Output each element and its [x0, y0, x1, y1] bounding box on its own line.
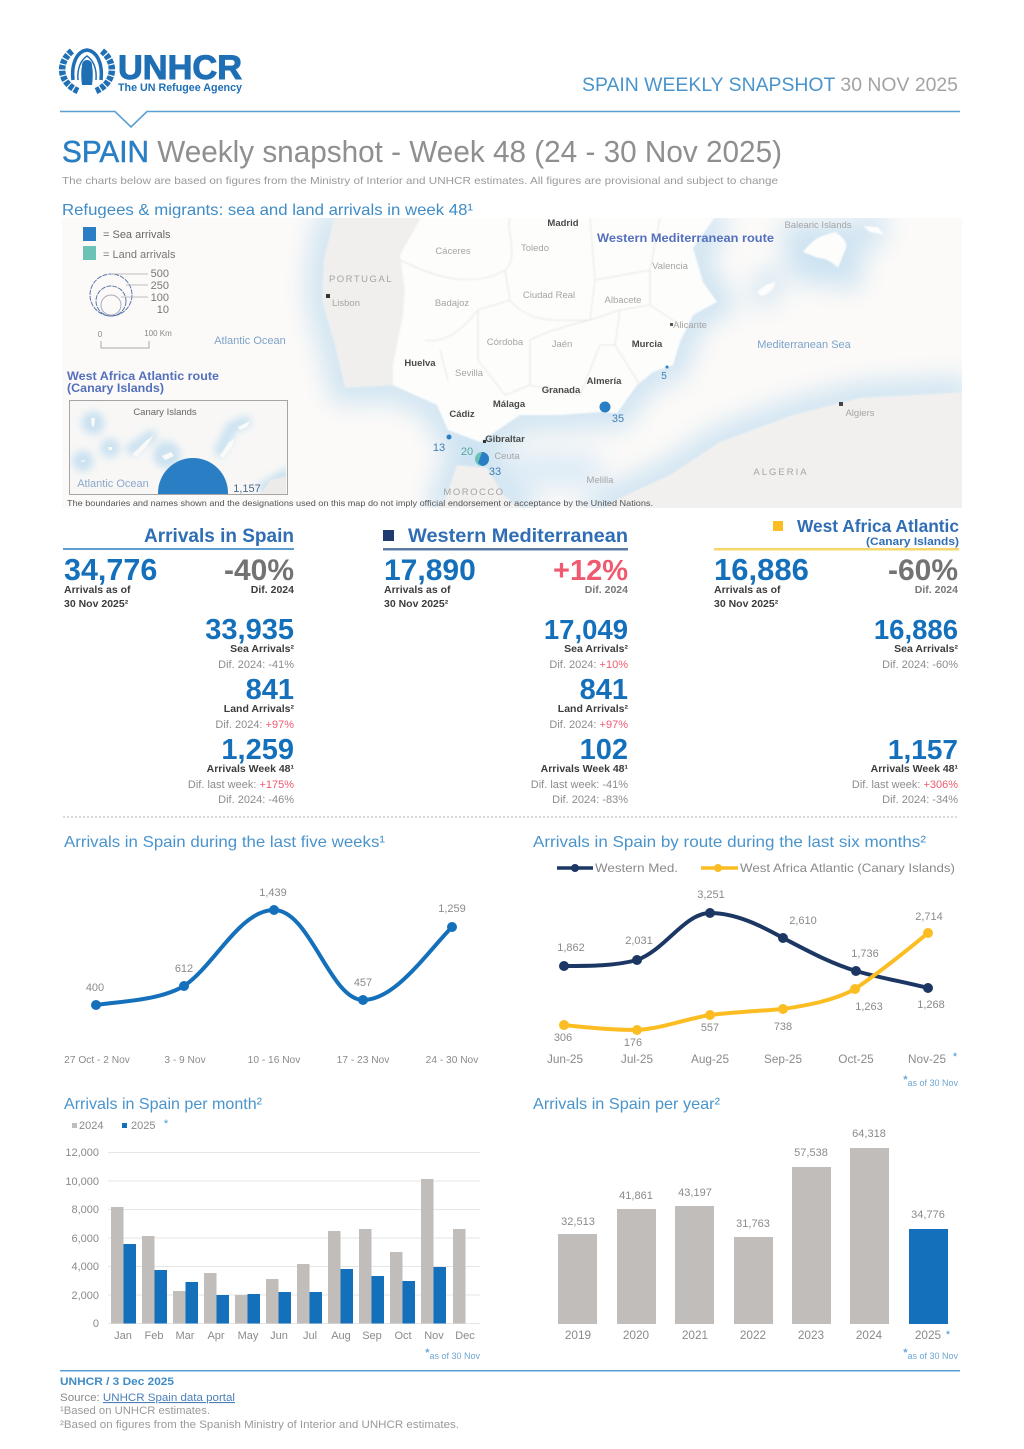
- Iberian land Portugal: [322, 210, 425, 388]
- x axis labels: *: [953, 1051, 958, 1063]
- data labels: [554, 889, 945, 1049]
- panel: arrivals map: [67, 218, 962, 508]
- data labels: 306: [554, 1032, 572, 1044]
- x axis labels: Dec: [455, 1330, 475, 1342]
- chart legend: *: [164, 1118, 169, 1130]
- panel: West Africa Atlantic: Sea Arrivals²: [894, 643, 958, 655]
- map legend: 0: [98, 330, 103, 339]
- x axis labels: May: [238, 1330, 259, 1342]
- chart legend: 2025: [131, 1120, 155, 1132]
- panel: Arrivals in Spain: Dif. 2024: +97%: [215, 719, 294, 731]
- Balearic islands: [757, 226, 884, 296]
- panel: Western Mediterranean: 30 Nov 2025²: [384, 598, 449, 610]
- map background: [62, 218, 962, 508]
- chart title: Arrivals in Spain per month²: [64, 1096, 263, 1113]
- total arrivals: 16,886: [714, 552, 809, 587]
- footnote: as of 30 Nov: *: [903, 1347, 908, 1359]
- chart title: Arrivals in Spain per year²: [533, 1096, 721, 1113]
- footnote: as of 30 Nov: as of 30 Nov: [907, 1351, 958, 1361]
- bars 2025: [124, 1244, 446, 1324]
- x axis labels: [547, 1051, 958, 1066]
- data labels: 2,610: [789, 915, 817, 927]
- total difference: +12%: [553, 555, 628, 587]
- footnote: as of 30 Nov: *: [903, 1074, 908, 1086]
- data labels: [561, 1128, 945, 1230]
- map place labels: Córdoba: [487, 337, 524, 348]
- x axis labels: 2024: [856, 1328, 883, 1342]
- heading: West Africa Atlantic: [797, 516, 959, 536]
- x axis labels: [114, 1330, 475, 1342]
- y axis labels: 4,000: [71, 1261, 99, 1273]
- x axis labels: 24 - 30 Nov: [426, 1055, 479, 1066]
- heading subtitle: (Canary Islands): [866, 536, 959, 548]
- chart legend: Western Med.: [595, 861, 678, 875]
- map legend: 500: [151, 268, 169, 280]
- panel: Western Mediterranean: Dif. 2024: +10%: [549, 659, 628, 671]
- x axis labels: [565, 1328, 951, 1342]
- map place labels: Melilla: [587, 475, 614, 486]
- credit line: UNHCR / 3 Dec 2025: [60, 1376, 174, 1388]
- x axis labels: 27 Oct - 2 Nov: [64, 1055, 131, 1066]
- map place labels: Algiers: [845, 408, 875, 419]
- data labels: 1,862: [557, 942, 585, 954]
- data labels: 32,513: [561, 1216, 595, 1228]
- bars: [558, 1148, 948, 1324]
- data labels: 1,259: [438, 903, 466, 915]
- x axis labels: 2021: [682, 1328, 708, 1342]
- panel: Western Mediterranean: Dif. last week: -41%: [531, 779, 628, 791]
- panel: Western Mediterranean: Arrivals Week 48¹: [541, 763, 629, 775]
- arrival bubbles: [433, 366, 668, 478]
- x axis labels: Mar: [176, 1330, 195, 1342]
- data labels: 31,763: [736, 1218, 770, 1230]
- title: SPAIN Weekly snapshot - Week 48 (24 - 30 Nov 2025): [62, 134, 782, 169]
- panel: Western Mediterranean: Arrivals as of: [384, 584, 451, 596]
- data labels: 557: [701, 1022, 719, 1034]
- x axis labels: Jun-25: [547, 1052, 583, 1066]
- map place labels: Albacete: [605, 295, 641, 306]
- panel: Arrivals in Spain: Dif. 2024: -46%: [218, 794, 294, 806]
- x axis labels: 2019: [565, 1328, 591, 1342]
- map place labels: Cáceres: [435, 246, 471, 257]
- map place labels: MOROCCO: [443, 487, 505, 498]
- land arrivals: 841: [580, 674, 628, 706]
- header rule with chevron: [60, 112, 960, 127]
- map place labels: Cádiz: [449, 409, 475, 420]
- panel: West Africa Atlantic: Dif. 2024: -34%: [882, 794, 958, 806]
- data labels: 612: [175, 963, 193, 975]
- data labels: 176: [624, 1037, 642, 1049]
- data labels: 400: [86, 982, 104, 994]
- map place labels: Murcia: [632, 339, 663, 350]
- y axis labels: 0: [93, 1318, 99, 1330]
- chart legend: [72, 1118, 169, 1132]
- route label: West Africa Atlantic: West Africa Atlantic route: [67, 369, 219, 383]
- map place labels: Balearic Islands: [784, 220, 852, 231]
- map legend: = Land arrivals: [103, 249, 176, 261]
- panel: West Africa Atlantic: Arrivals Week 48¹: [871, 763, 959, 775]
- sea arrivals: 33,935: [205, 614, 294, 646]
- map legend: 10: [157, 304, 169, 316]
- x axis labels: Aug-25: [691, 1052, 729, 1066]
- data labels: 2,031: [625, 935, 653, 947]
- x axis labels: Nov: [424, 1330, 444, 1342]
- data labels: 34,776: [911, 1209, 945, 1221]
- panel: Arrivals in Spain: Sea Arrivals²: [230, 643, 294, 655]
- header snapshot label: SPAIN WEEKLY SNAPSHOT 30 NOV 2025: [582, 75, 958, 96]
- sea labels: Mediterranean Sea: [757, 339, 852, 351]
- map place labels: Valencia: [652, 261, 689, 272]
- map place labels: Ceuta: [494, 451, 520, 462]
- x axis labels: 10 - 16 Nov: [248, 1055, 301, 1066]
- chart title: Arrivals in Spain during the last five weeks¹: [64, 834, 385, 851]
- panel: Arrivals in Spain: Arrivals as of: [64, 584, 131, 596]
- y axis labels: [65, 1147, 99, 1330]
- panel: West Africa Atlantic: 30 Nov 2025²: [714, 598, 779, 610]
- x axis labels: [64, 1055, 479, 1066]
- map legend: [83, 227, 176, 348]
- line: Western Med: [559, 908, 933, 993]
- panel: Western Mediterranean: [383, 525, 629, 806]
- data labels: 1,263: [855, 1001, 883, 1013]
- panel: Western Mediterranean: Dif. 2024: +97%: [549, 719, 628, 731]
- icon: route colour square: [773, 521, 783, 531]
- week arrivals: 1,259: [221, 734, 294, 766]
- map place labels: Alicante: [673, 320, 707, 331]
- sea labels: Atlantic Ocean: [214, 335, 286, 347]
- y axis labels: 6,000: [71, 1233, 99, 1245]
- panel: Arrivals in Spain: Dif. last week: +175%: [188, 779, 294, 791]
- total arrivals: 17,890: [384, 554, 476, 587]
- chart title: Arrivals in Spain by route during the last six months²: [533, 834, 927, 851]
- sea arrivals: 17,049: [544, 614, 628, 645]
- footnote: as of 30 Nov: as of 30 Nov: [907, 1078, 958, 1088]
- map heading: Refugees & migrants: sea and land arrivals in week 48¹: [62, 202, 473, 219]
- footnote: as of 30 Nov: as of 30 Nov: [429, 1351, 480, 1361]
- x axis labels: 2020: [623, 1328, 650, 1342]
- data labels: 1,268: [917, 999, 945, 1011]
- panel: Western Mediterranean: Land Arrivals²: [558, 703, 628, 715]
- inset: Canary Islands: [69, 400, 288, 495]
- panel: Arrivals in Spain: Dif. 2024: -41%: [218, 659, 294, 671]
- y axis labels: 2,000: [71, 1290, 99, 1302]
- y axis labels: 10,000: [65, 1176, 99, 1188]
- chart: arrivals by route: [533, 834, 958, 1088]
- x axis labels: Oct-25: [838, 1052, 874, 1066]
- arrival bubbles: 5: [661, 371, 667, 382]
- map place labels: ALGERIA: [753, 467, 809, 478]
- map place labels: [326, 218, 875, 498]
- sea arrivals: 16,886: [874, 614, 958, 645]
- x axis labels: Sep: [362, 1330, 382, 1342]
- icon: route colour square: [383, 530, 394, 541]
- panel: West Africa Atlantic: Dif. 2024: [915, 584, 958, 596]
- chart legend: West Africa Atlantic (Canary Islands): [740, 861, 955, 875]
- map legend: = Sea arrivals: [103, 229, 171, 241]
- data labels: [86, 887, 466, 994]
- map place labels: Toledo: [521, 243, 549, 254]
- data labels: 2,714: [915, 911, 943, 923]
- data labels: 1,439: [259, 887, 287, 899]
- panel: West Africa Atlantic: Dif. last week: +306%: [852, 779, 958, 791]
- map place labels: PORTUGAL: [329, 274, 393, 285]
- panel: Western Mediterranean: Dif. 2024: [585, 584, 628, 596]
- sea glow: [322, 210, 970, 515]
- icon: UNHCR emblem: [62, 50, 112, 91]
- x axis labels: Jul: [303, 1330, 317, 1342]
- heading: Western Mediterranean: [408, 525, 628, 547]
- chart legend: 2024: [79, 1120, 103, 1132]
- y axis labels: 12,000: [65, 1147, 99, 1159]
- x axis labels: Jul-25: [621, 1052, 653, 1066]
- map place labels: Gibraltar: [485, 434, 525, 445]
- arrival bubbles: 33: [489, 466, 501, 478]
- map place labels: Lisbon: [332, 298, 360, 309]
- data labels: 1,736: [851, 948, 879, 960]
- panel: Arrivals in Spain: Arrivals Week 48¹: [207, 763, 295, 775]
- chart legend: [557, 861, 955, 875]
- map place labels: Málaga: [493, 399, 526, 410]
- x axis labels: 17 - 23 Nov: [337, 1055, 390, 1066]
- x axis labels: Nov-25: [908, 1052, 946, 1066]
- bars 2024: [111, 1179, 466, 1324]
- arrival bubbles: 20: [461, 446, 473, 458]
- x axis labels: Feb: [145, 1330, 163, 1342]
- panel: West Africa Atlantic: [714, 516, 959, 806]
- logo tagline: The UN Refugee Agency: [118, 82, 243, 94]
- sea labels: [214, 335, 852, 351]
- inset: Canary Islands: Atlantic Ocean: [77, 478, 149, 490]
- week arrivals: 1,157: [888, 734, 958, 765]
- line: West Africa Atlantic: [559, 928, 933, 1035]
- data labels: 64,318: [852, 1128, 886, 1140]
- land arrivals: 841: [246, 674, 294, 706]
- arrival bubbles: 35: [612, 413, 624, 425]
- panel: Arrivals in Spain: [63, 526, 295, 806]
- x axis labels: 2023: [798, 1328, 825, 1342]
- map legend: 250: [151, 280, 169, 292]
- inset: Canary Islands: Canary Islands: [133, 407, 197, 418]
- data labels: 41,861: [619, 1190, 653, 1202]
- total difference: -40%: [224, 554, 294, 587]
- map place labels: Badajoz: [435, 298, 469, 309]
- map legend: 100: [151, 292, 169, 304]
- route label: Canary Islands: (Canary Islands): [67, 381, 164, 395]
- data labels: 43,197: [678, 1187, 712, 1199]
- province boundaries: [400, 218, 680, 395]
- footnote: as of 30 Nov: *: [425, 1347, 430, 1359]
- map legend: 100 Km: [144, 329, 172, 338]
- data labels: 738: [774, 1021, 792, 1033]
- x axis labels: *: [946, 1329, 951, 1341]
- logo wordmark: UNHCR: [118, 49, 242, 87]
- inset: Canary Islands: 1,157: [233, 483, 261, 495]
- gridlines: [108, 1152, 480, 1324]
- Morocco and Algeria land: [440, 392, 970, 515]
- footnote 1: ¹Based on UNHCR estimates.: [60, 1405, 210, 1417]
- Spain land: [393, 210, 720, 442]
- arrival bubbles: 13: [433, 442, 445, 454]
- source line: Source: UNHCR Spain data portal: [60, 1392, 235, 1404]
- map place labels: Huelva: [404, 358, 436, 369]
- heading: Arrivals in Spain: [144, 526, 294, 547]
- map disclaimer: The boundaries and names shown and the designations used on this map do not imply official endorsement or acceptance by the United Nations.: [67, 498, 653, 508]
- footnote 2: ²Based on figures from the Spanish Ministry of Interior and UNHCR estimates.: [60, 1419, 459, 1431]
- x axis labels: Aug: [331, 1330, 351, 1342]
- chart: arrivals per year: [533, 1096, 958, 1361]
- total arrivals: 34,776: [64, 553, 157, 587]
- data labels: 457: [354, 977, 372, 989]
- data labels: 3,251: [697, 889, 725, 901]
- total difference: -60%: [888, 554, 958, 587]
- panel: Western Mediterranean: Dif. 2024: -83%: [552, 794, 628, 806]
- x axis labels: Oct: [394, 1330, 412, 1342]
- x axis labels: 2025: [915, 1328, 942, 1342]
- map place labels: Almería: [587, 376, 622, 387]
- y axis labels: 8,000: [71, 1204, 99, 1216]
- panel: West Africa Atlantic: Arrivals as of: [714, 584, 781, 596]
- panel: Western Mediterranean: Sea Arrivals²: [564, 643, 628, 655]
- x axis labels: Jan: [114, 1330, 132, 1342]
- subtitle: The charts below are based on figures from the Ministry of Interior and UNHCR estimates. All figures are provisional and subject to change: [62, 175, 778, 187]
- chart: arrivals per month: [64, 1096, 480, 1361]
- map place labels: Madrid: [547, 218, 579, 229]
- x axis labels: Jun: [270, 1330, 288, 1342]
- data labels: 57,538: [794, 1147, 828, 1159]
- map place labels: Ciudad Real: [523, 290, 575, 301]
- panel: Arrivals in Spain: Land Arrivals²: [224, 703, 294, 715]
- x axis labels: Apr: [207, 1330, 225, 1342]
- chart: arrivals last five weeks: [64, 834, 479, 1066]
- panel: Arrivals in Spain: 30 Nov 2025²: [64, 598, 129, 610]
- panel: Arrivals in Spain: Dif. 2024: [251, 584, 294, 596]
- footer notes: [60, 1376, 459, 1431]
- line series: [91, 905, 457, 1010]
- panel: West Africa Atlantic: Dif. 2024: -60%: [882, 659, 958, 671]
- UNHCR logo: [62, 49, 243, 94]
- x axis labels: 3 - 9 Nov: [164, 1055, 207, 1066]
- map place labels: Jaén: [552, 339, 572, 350]
- x axis labels: 2022: [740, 1328, 766, 1342]
- map place labels: Sevilla: [455, 368, 484, 379]
- x axis labels: Sep-25: [764, 1052, 802, 1066]
- map place labels: Granada: [542, 385, 581, 396]
- route label: Western Mediterranean: Western Mediterranean route: [597, 231, 774, 245]
- week arrivals: 102: [580, 734, 628, 766]
